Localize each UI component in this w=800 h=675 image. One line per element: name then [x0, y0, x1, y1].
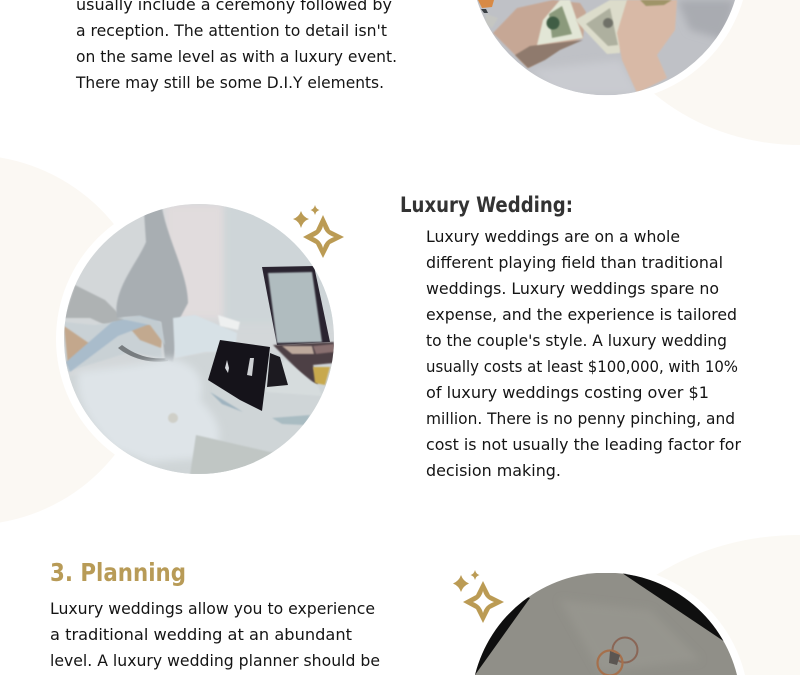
- heading: Luxury Wedding: Luxury Wedding:: [400, 193, 573, 217]
- background blob: bottom right: [576, 535, 800, 675]
- photo ring: white border around wedding shoes photo: [56, 196, 342, 482]
- text block: planning description: Luxury weddings allow you to experience: [50, 600, 375, 618]
- heading: 3. Planning: 3. Planning: [50, 558, 186, 587]
- text block: traditional wedding description: There may still be some D.I.Y elements.: [75, 74, 384, 92]
- text block: luxury wedding description: expense, and the experience is tailored: [426, 306, 737, 324]
- text block: luxury wedding description: cost is not usually the leading factor for: [426, 436, 742, 454]
- text block: traditional wedding description: [75, 0, 397, 92]
- photo ring: white border around money photo: [469, 0, 743, 102]
- text block: luxury wedding description: of luxury weddings costing over $1: [426, 384, 709, 402]
- text block: luxury wedding description: decision making.: [426, 462, 561, 480]
- text block: luxury wedding description: [426, 228, 742, 480]
- photo: wedding rings on marble: [475, 573, 737, 675]
- text block: planning description: [50, 600, 380, 670]
- photo ring: white border around rings photo: [467, 566, 745, 675]
- background blob: top right: [594, 0, 800, 145]
- text block: luxury wedding description: million. There is no penny pinching, and: [426, 410, 735, 428]
- icon: sparkle stars near shoes photo: [293, 205, 344, 258]
- text block: luxury wedding description: different playing field than traditional: [426, 254, 723, 272]
- photo: bridal shoes and accessories: [60, 200, 340, 480]
- photo: hands counting money: [477, 0, 735, 95]
- text block: luxury wedding description: weddings. Luxury weddings spare no: [426, 280, 719, 298]
- text block: luxury wedding description: usually costs at least $100,000, with 10%: [426, 358, 738, 376]
- text block: luxury wedding description: Luxury weddings are on a whole: [426, 228, 680, 246]
- text block: planning description: a traditional wedding at an abundant: [50, 626, 352, 644]
- text block: luxury wedding description: to the couple's style. A luxury wedding: [426, 332, 727, 350]
- text block: planning description: level. A luxury wedding planner should be: [50, 652, 380, 670]
- background blob: middle left: [0, 158, 155, 522]
- text block: traditional wedding description: on the same level as with a luxury event.: [76, 48, 397, 66]
- text block: traditional wedding description: a reception. The attention to detail isn't: [76, 22, 387, 40]
- icon: sparkle stars near rings photo: [453, 570, 504, 623]
